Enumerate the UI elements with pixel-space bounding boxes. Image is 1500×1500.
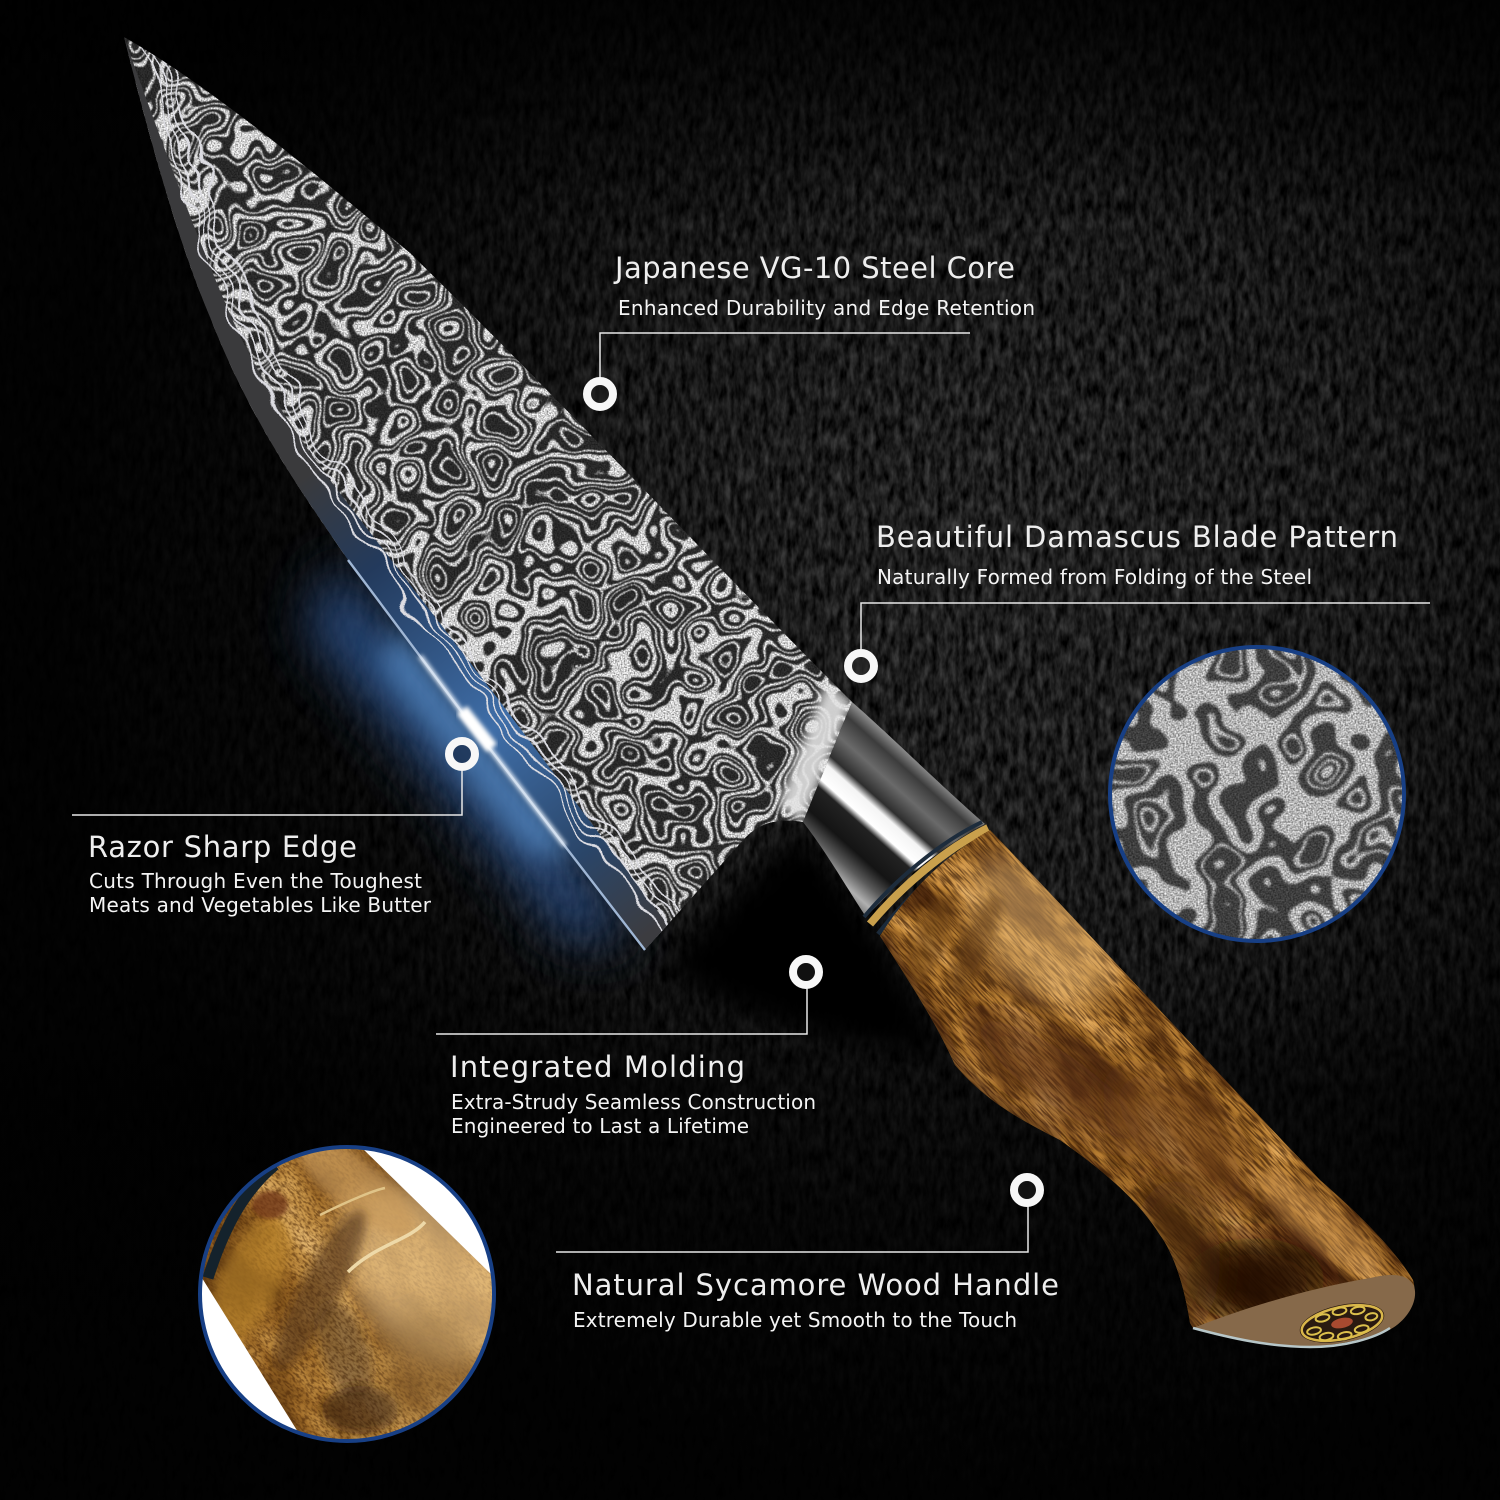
inset white background wedges [364,1150,491,1274]
callout: Natural Sycamore Wood Handle [556,1177,1059,1332]
inset wood shading [210,1149,492,1438]
callout: Razor Sharp Edge: Cuts Through Even the Toughest [89,869,422,893]
callout: Integrated Molding [436,959,819,1138]
callout: Integrated Molding: Extra-Strudy Seamless Construction [451,1090,816,1114]
ridge near bolster [778,682,852,822]
callout: Japanese VG-10 Steel Core: Enhanced Durability and Edge Retention [618,296,1035,320]
shadow under knife heel [660,825,950,1060]
blade bevel along the edge [124,37,668,950]
wavy temper lines [140,10,697,948]
mosaic pin [1296,1296,1388,1350]
inset dark ring strip [208,1165,275,1278]
callout: Japanese VG-10 Steel Core: Japanese VG-10 Steel Core [613,251,1015,285]
callout: Integrated Molding: Integrated Molding [450,1050,745,1084]
callout: Natural Sycamore Wood Handle: Extremely Durable yet Smooth to the Touch [573,1308,1017,1332]
callout: Beautiful Damascus Blade Pattern: Naturally Formed from Folding of the Steel [877,565,1312,589]
bolster [803,702,985,917]
callout: Beautiful Damascus Blade Pattern [848,520,1430,679]
handle end cap [1193,1275,1415,1347]
callout: Natural Sycamore Wood Handle: Natural Sycamore Wood Handle [572,1268,1059,1302]
callout: Integrated Molding: Engineered to Last a Lifetime [451,1114,749,1138]
blade edge highlight [348,560,645,950]
inset: damascus pattern close-up [1108,645,1406,943]
inset: wood handle close-up [198,1145,496,1443]
wood handle [880,830,1414,1346]
callout: Japanese VG-10 Steel Core [587,251,1035,407]
blade with damascus pattern [124,37,852,949]
blue glow along blade edge [305,565,630,940]
callout: Razor Sharp Edge: Meats and Vegetables Like Butter [89,893,432,917]
callout: Beautiful Damascus Blade Pattern: Beautiful Damascus Blade Pattern [876,520,1398,554]
callout: Razor Sharp Edge [72,741,475,917]
handle rings [864,822,993,934]
callout: Razor Sharp Edge: Razor Sharp Edge [88,830,357,864]
handle shading [880,827,1395,1340]
